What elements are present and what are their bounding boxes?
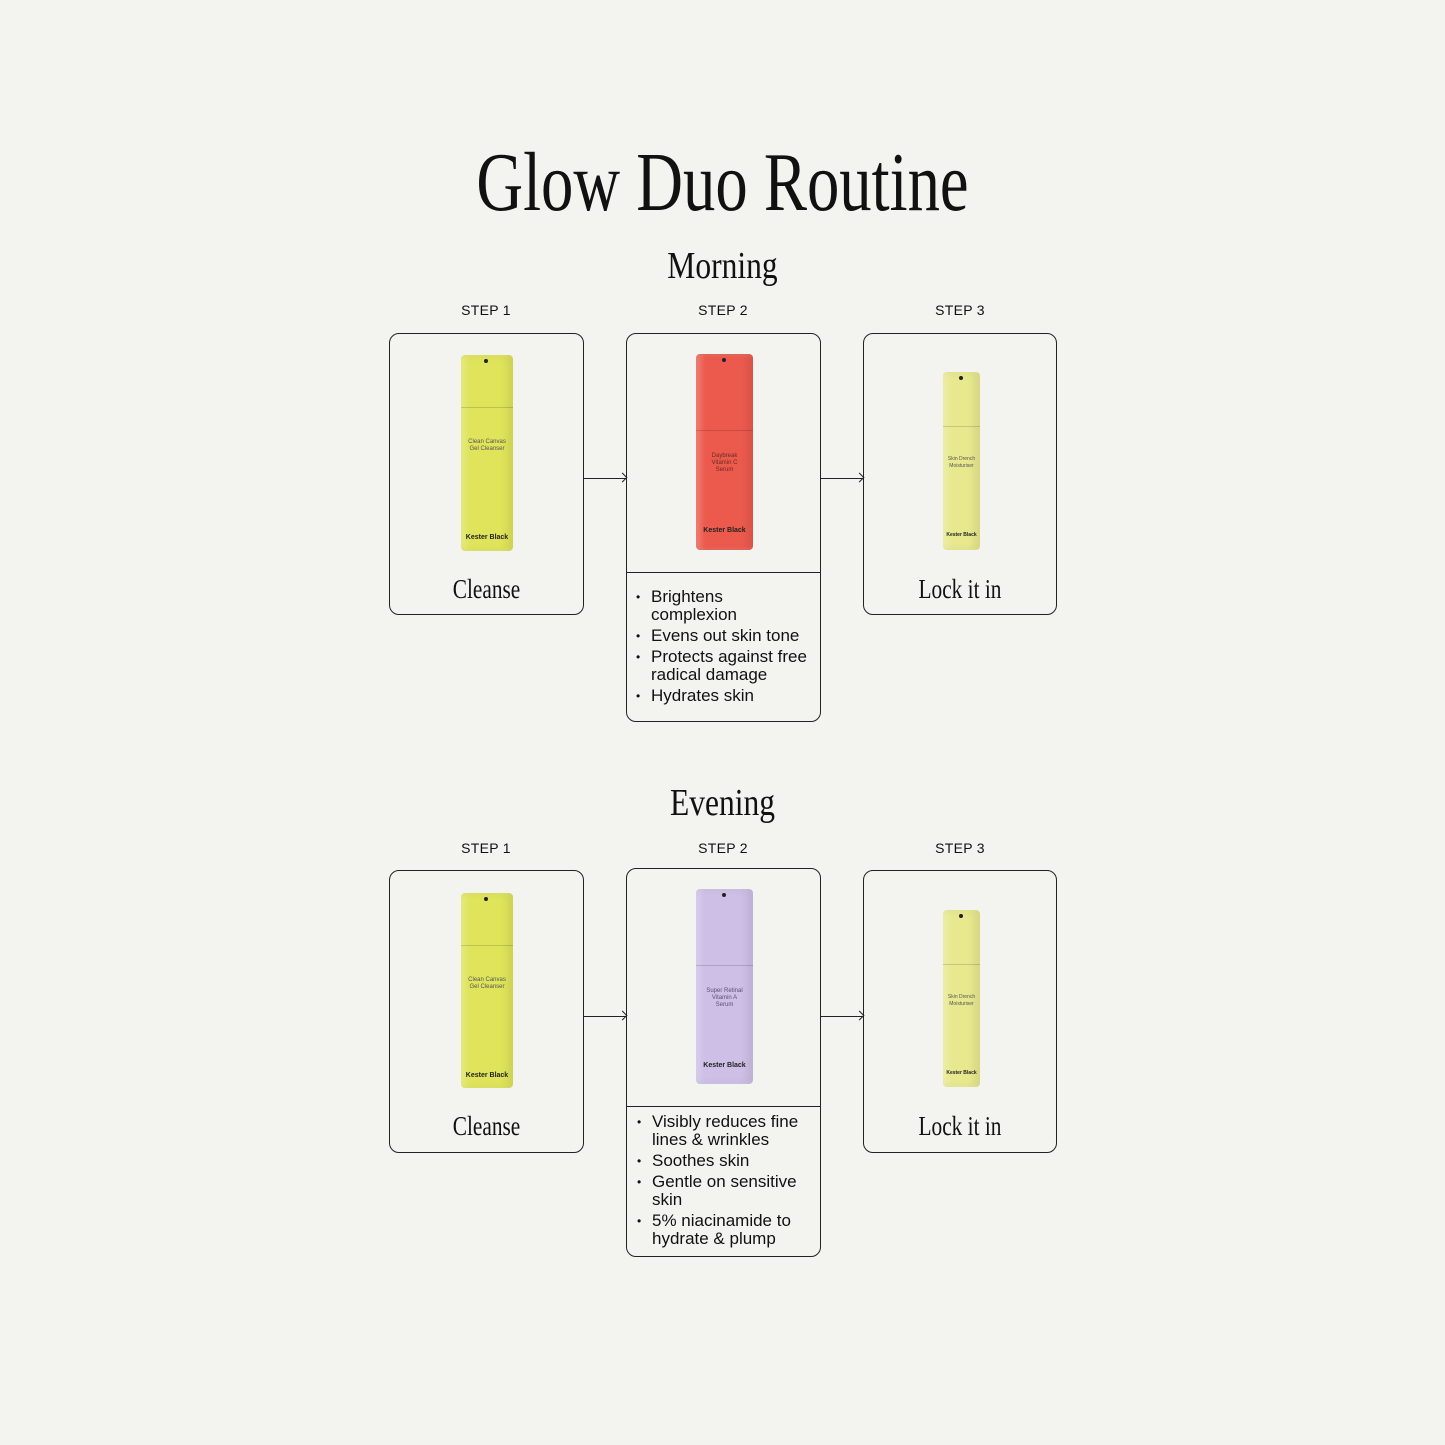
icon: moisturiser [943, 372, 980, 550]
arrow [584, 478, 626, 479]
step labels morning: STEP 1 [461, 302, 511, 318]
label: Lock it in [919, 1111, 1001, 1141]
title: Glow Duo Routine [476, 136, 969, 229]
panel: evening step 2 [626, 868, 821, 1257]
icon: vitamin C serum: Serum [716, 467, 733, 473]
benefits list: Soothes skin [652, 1151, 749, 1170]
icon: cleanser bottle: Gel Cleanser [469, 446, 504, 452]
icon: vitamin C serum: Vitamin C [712, 460, 737, 466]
benefits list [636, 587, 807, 705]
icon: moisturiser: Moisturiser [949, 1001, 974, 1007]
arrow [584, 1016, 626, 1017]
benefits list: Protects against free radical damage [651, 647, 807, 684]
panel: morning step 1 [389, 333, 584, 615]
benefits list: Hydrates skin [651, 686, 754, 705]
icon: moisturiser: Skin Drench [948, 994, 975, 1000]
label: Cleanse [453, 1111, 520, 1141]
heading: evening: Evening [670, 782, 775, 824]
arrow [821, 478, 863, 479]
icon: moisturiser [943, 910, 980, 1087]
benefits list: 5% niacinamide to hydrate & plump [652, 1211, 791, 1248]
benefits list: complexion [651, 605, 737, 624]
text: STEP 2 [698, 302, 748, 318]
icon: vitamin C serum: Kester Black [703, 527, 746, 534]
icon: cleanser bottle: Kester Black [466, 534, 508, 541]
icon: moisturiser: Kester Black [946, 532, 977, 538]
icon: cleanser bottle: Clean Canvas [468, 977, 506, 983]
panel: evening step 3 [863, 870, 1057, 1153]
icon: cleanser bottle: Clean Canvas [468, 439, 506, 445]
icon: retinal serum: Serum [716, 1002, 733, 1008]
icon: retinal serum: Kester Black [703, 1062, 746, 1069]
icon: moisturiser: Skin Drench [948, 456, 975, 462]
icon: moisturiser: Moisturiser [949, 463, 974, 469]
panel: morning step 3 [863, 333, 1057, 615]
panel: morning step 2 [626, 333, 821, 722]
panel: evening step 1 [389, 870, 584, 1153]
icon: cleanser bottle: Gel Cleanser [469, 984, 504, 990]
label: Cleanse [453, 574, 520, 604]
icon: vitamin C serum [696, 354, 753, 550]
arrow [821, 1016, 863, 1017]
label: Lock it in [919, 574, 1001, 604]
benefits list: Evens out skin tone [651, 626, 799, 645]
benefits list: Gentle on sensitive skin [652, 1172, 797, 1209]
step labels evening: STEP 1 [461, 840, 511, 856]
benefits list [638, 1112, 798, 1248]
heading: morning: Morning [667, 245, 778, 287]
text: STEP 3 [935, 302, 985, 318]
text: STEP 3 [935, 840, 985, 856]
icon: cleanser bottle [461, 355, 513, 551]
icon: vitamin C serum: Daybreak [712, 453, 737, 459]
icon: retinal serum [696, 889, 753, 1084]
benefits list: Visibly reduces fine lines & wrinkles [652, 1112, 798, 1149]
icon: cleanser bottle: Kester Black [466, 1072, 508, 1079]
text: STEP 2 [698, 840, 748, 856]
benefits list: Brightens [651, 587, 723, 606]
icon: retinal serum: Super Retinal [706, 988, 743, 994]
icon: moisturiser: Kester Black [946, 1070, 977, 1076]
icon: retinal serum: Vitamin A [712, 995, 737, 1001]
icon: cleanser bottle [461, 893, 513, 1088]
